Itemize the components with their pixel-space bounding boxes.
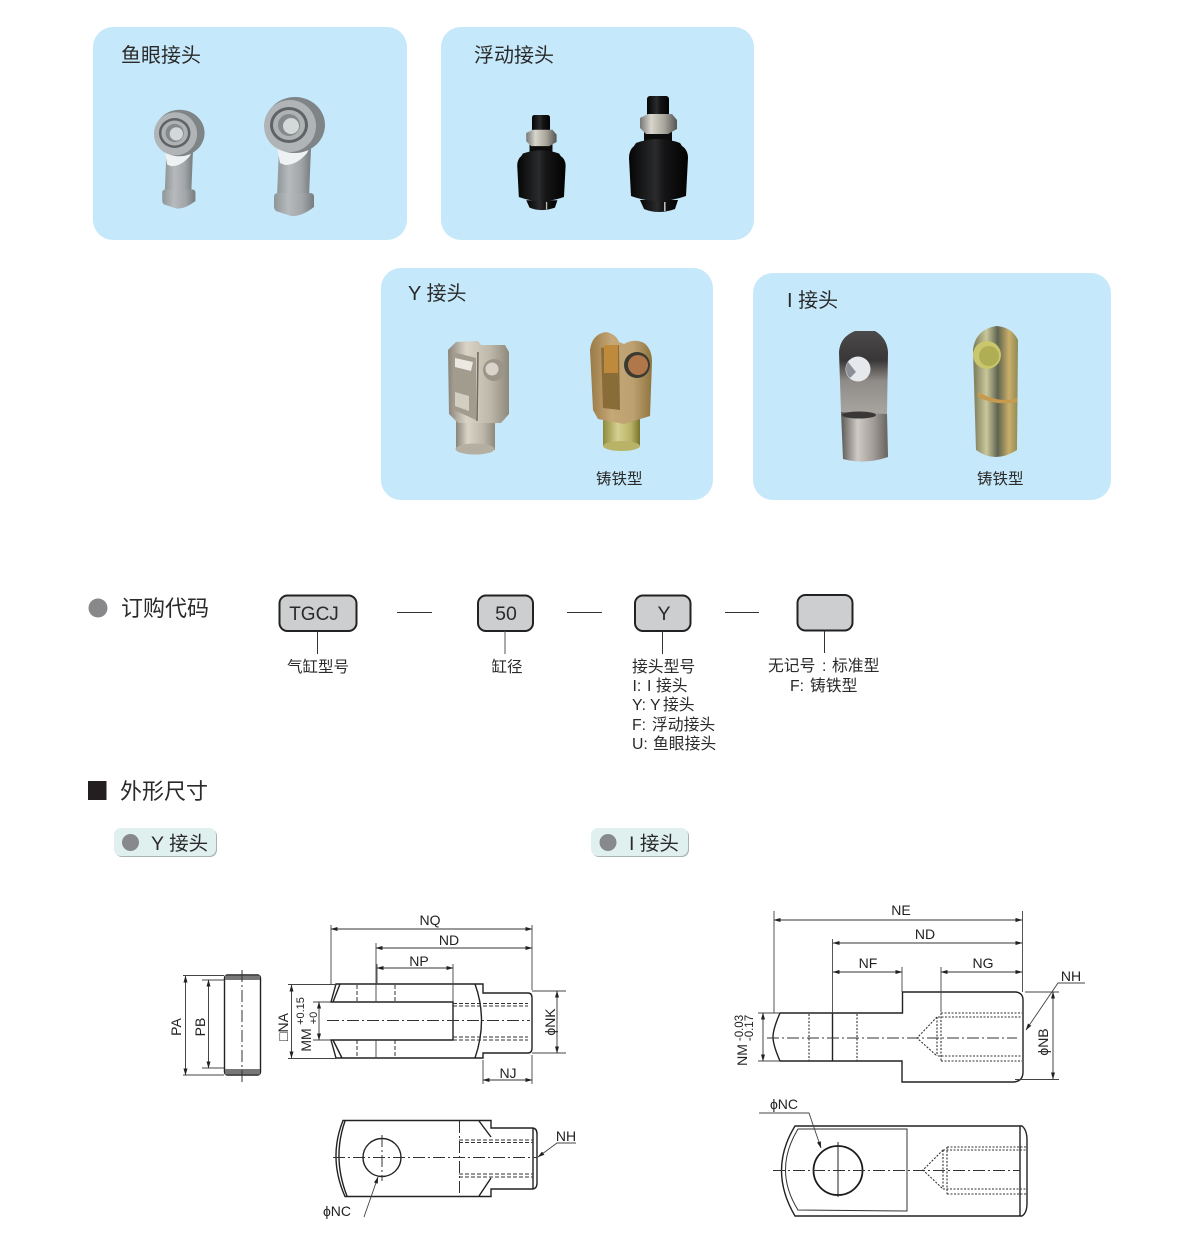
panel: 浮动接头	[441, 27, 754, 240]
tag: Y 接头: Y 接头	[151, 833, 208, 855]
heading: I 接头: I 接头	[787, 289, 838, 312]
photo: small floating joint	[517, 115, 566, 210]
order code: 气缸型号: 气缸型号	[287, 657, 349, 676]
order code: 接头型号: 接头	[656, 677, 688, 695]
drawing: Y joint front view: NQ	[420, 912, 441, 928]
order code: 接头型号: Y:	[632, 697, 646, 714]
drawing: Y joint pin: PB	[192, 1018, 208, 1036]
order code: 接头型号: 鱼眼接头	[653, 735, 716, 753]
tag: I 接头: I 接头	[629, 833, 679, 855]
order code: 缸径: 50	[495, 603, 517, 625]
drawing: I joint side view: -0.17	[744, 1015, 756, 1041]
photo: small rod end	[154, 110, 205, 209]
separator dash	[567, 612, 602, 614]
order code: 接头型号: F:	[632, 717, 646, 734]
heading: Y 接头: Y 接头	[408, 282, 467, 305]
order code: 接头型号: 接头	[663, 696, 695, 714]
drawing: Y joint top view: ϕNC	[323, 1203, 351, 1219]
drawing: Y joint front view	[275, 912, 566, 1084]
separator dash	[397, 612, 432, 614]
order code: 接头型号: 浮动接头	[652, 716, 715, 734]
drawing: I joint side view: NH	[1061, 968, 1081, 984]
drawing: Y joint front view: +0	[308, 1012, 320, 1024]
drawing: I joint side view: ϕNB	[1035, 1028, 1051, 1056]
photo: large rod end	[264, 97, 325, 216]
order code: 缸径	[478, 596, 533, 676]
order code: 标准型 / 铸铁型: 标准型	[832, 657, 880, 675]
order code: 标准型 / 铸铁型: 铸铁型	[810, 677, 858, 695]
tag: I 接头	[591, 828, 689, 857]
separator dash	[725, 612, 759, 614]
photo: cast iron eye joint	[973, 326, 1018, 457]
drawing: Y joint top view: NH	[556, 1128, 576, 1144]
order code: 接头型号: 接头型号	[632, 658, 695, 676]
drawing: Y joint front view: ND	[439, 932, 459, 948]
heading: 浮动接头: 浮动接头	[474, 44, 554, 67]
photo: cast iron clevis	[590, 332, 652, 451]
drawing: I joint side view: NG	[972, 955, 994, 971]
photo: steel eye joint	[839, 331, 888, 462]
panel: 鱼眼接头	[93, 27, 407, 240]
order code: 标准型 / 铸铁型: :	[822, 658, 826, 675]
drawing: Y joint front view: MM	[298, 1028, 314, 1052]
panel: Y 接头	[381, 268, 713, 500]
drawing: Y joint front view: NP	[409, 953, 429, 969]
drawing: I joint top view: ϕNC	[770, 1096, 798, 1112]
caption: 铸铁型: 铸铁型	[977, 470, 1024, 488]
drawing: Y joint front view: □NA	[275, 1012, 291, 1041]
caption: 铸铁型: 铸铁型	[596, 470, 643, 488]
photo: nickel clevis	[448, 341, 509, 454]
drawing: I joint side view: NE	[891, 902, 911, 918]
order code: 缸径: 缸径	[491, 657, 523, 676]
order code: 接头型号: I	[647, 678, 651, 695]
order code: 接头型号: I:	[632, 678, 641, 695]
drawing: I joint side view: ND	[915, 926, 935, 942]
drawing: Y joint top view	[323, 1120, 576, 1219]
order code: 标准型 / 铸铁型: 无记号	[768, 657, 815, 675]
drawing: I joint side view: -0.03	[734, 1015, 746, 1041]
drawing: I joint side view: NM	[734, 1044, 750, 1066]
order code: 气缸型号	[280, 596, 356, 676]
drawing: I joint side view: NF	[859, 955, 877, 971]
drawing: I joint side view	[734, 902, 1085, 1082]
drawing: Y joint pin: PA	[168, 1018, 184, 1036]
order code: 接头型号: Y	[657, 603, 671, 625]
order code: 标准型 / 铸铁型	[768, 595, 880, 695]
order code: 标准型 / 铸铁型: F:	[790, 678, 804, 695]
drawing: Y joint pin	[168, 970, 260, 1082]
drawing: Y joint front view: ϕNK	[542, 1008, 558, 1036]
section heading: 外形尺寸: 外形尺寸	[120, 779, 208, 804]
panel: I 接头	[753, 273, 1111, 500]
drawing: Y joint front view: NJ	[499, 1065, 517, 1081]
photo: large floating joint	[629, 96, 688, 212]
order code: 接头型号	[632, 596, 716, 753]
drawing: Y joint front view: +0.15	[295, 997, 307, 1025]
heading: 鱼眼接头: 鱼眼接头	[121, 44, 201, 67]
order code: 接头型号: U:	[632, 736, 648, 753]
drawing: I joint top view	[759, 1096, 1027, 1216]
order code: 接头型号: Y	[650, 697, 661, 714]
section heading: 订购代码: 订购代码	[121, 596, 209, 621]
tag: Y 接头	[114, 828, 217, 857]
order code: 气缸型号: TGCJ	[289, 604, 339, 625]
